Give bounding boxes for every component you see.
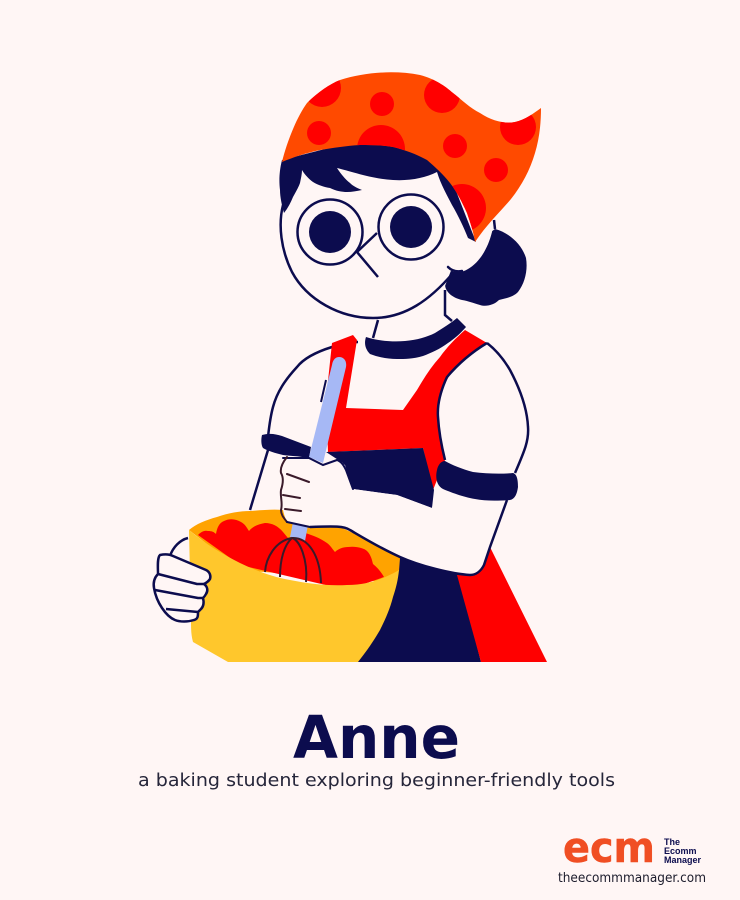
whisk handle xyxy=(309,357,346,463)
logo wordmark xyxy=(664,837,702,865)
logo xyxy=(558,823,706,886)
logo wordmark: Manager xyxy=(664,855,702,865)
logo wordmark: Ecomm xyxy=(664,846,697,856)
illustration: Anne baking xyxy=(154,69,547,662)
logo letters: ecm xyxy=(563,823,655,872)
torso and upper arms xyxy=(250,342,528,525)
neck xyxy=(372,285,452,340)
head xyxy=(279,69,541,318)
infographic canvas xyxy=(139,72,705,885)
forearm and hand fill xyxy=(280,458,507,575)
website: theecommmanager.com xyxy=(558,871,706,886)
collar xyxy=(365,318,466,359)
face xyxy=(281,150,494,318)
name heading: Anne xyxy=(293,704,460,772)
apron chest navy xyxy=(326,448,434,508)
strap edge line xyxy=(321,380,326,402)
whisk shaft lower xyxy=(290,522,308,541)
bandana xyxy=(282,69,541,242)
apron bib xyxy=(326,330,487,490)
left hand xyxy=(154,554,210,622)
bowl body xyxy=(189,530,399,662)
sleeve band xyxy=(436,461,518,501)
bun xyxy=(445,229,527,306)
left cuff xyxy=(261,434,311,458)
bowl rim xyxy=(189,510,400,582)
back of left hand xyxy=(170,538,188,556)
whisking hand lines xyxy=(281,457,353,527)
right inner arm line xyxy=(438,343,487,460)
whisk wires xyxy=(265,538,321,583)
glasses xyxy=(298,194,444,277)
pupils xyxy=(309,206,432,253)
filling xyxy=(198,519,384,590)
subtitle: a baking student exploring beginner-friendly tools xyxy=(138,770,615,791)
logo wordmark: The xyxy=(664,837,680,847)
skirt xyxy=(355,547,547,662)
hair xyxy=(279,140,476,242)
